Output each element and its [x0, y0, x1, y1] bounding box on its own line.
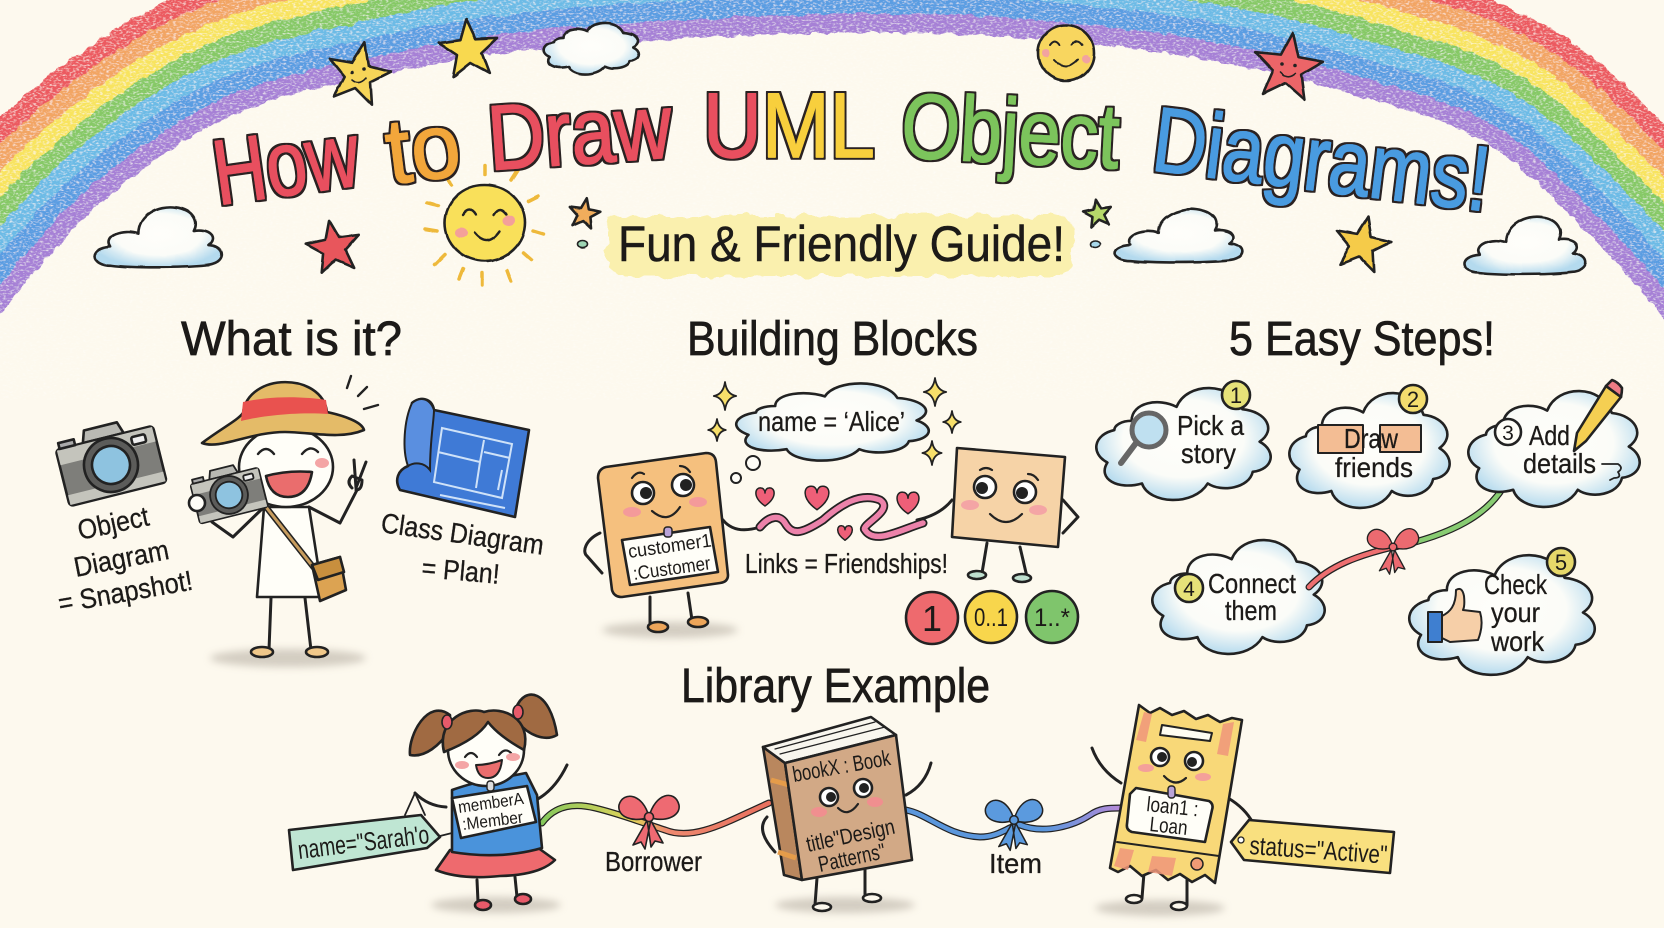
camera caption: = Snapshot! [56, 565, 195, 619]
link arms [723, 500, 952, 530]
panel: 5 easy steps [1096, 380, 1640, 675]
thought cloud [731, 383, 929, 483]
bow: blue [985, 799, 1043, 850]
subtitle with highlight: Fun & Friendly Guide! [618, 216, 1065, 272]
step 3 cloud: details [1523, 448, 1596, 479]
character: customer block [585, 453, 738, 638]
title: Diagrams! [1148, 89, 1495, 231]
attribute tag: name [289, 793, 452, 870]
step 3 cloud: Add [1529, 420, 1570, 451]
bow: red [619, 795, 679, 849]
smiley sun top [1038, 25, 1094, 81]
tag: memberA [452, 781, 536, 838]
title: Draw [484, 75, 675, 190]
star: smiling yellow [322, 36, 396, 108]
character: member girl [410, 695, 567, 913]
camera caption: Diagram [71, 534, 171, 583]
cloud: left [95, 207, 222, 267]
label: Item: Item [989, 848, 1042, 879]
character: book: Patterns" [816, 838, 888, 877]
step 5 cloud [1409, 548, 1595, 675]
character: second block [952, 448, 1078, 582]
cloud: top [544, 23, 639, 74]
attribute tag: status: status="Active" [1249, 830, 1388, 870]
step 5 cloud: Check [1484, 569, 1548, 600]
step 4 cloud: Connect [1208, 568, 1296, 599]
panel: library example [289, 695, 1394, 916]
cloud: far right [1464, 217, 1586, 274]
star: smiling red [1250, 28, 1327, 102]
ribbon: borrower link [542, 803, 769, 833]
pink ribbon link [760, 498, 923, 536]
multiplicity badges: 1..* [1034, 604, 1070, 632]
name tag [622, 527, 718, 585]
title: How [207, 103, 366, 225]
step 4 cloud: them [1225, 595, 1277, 626]
step 1 cloud: 1 [1230, 383, 1242, 408]
hearts [756, 486, 919, 540]
character: book: title"Design [804, 814, 897, 857]
character: loan ticket [1092, 705, 1253, 916]
panel: building blocks [585, 378, 1078, 644]
tag: memberA: memberA [457, 789, 525, 817]
star: small green [1081, 197, 1114, 228]
tag: loan1: loan1 : [1145, 793, 1200, 821]
step 2 cloud: friends [1335, 452, 1413, 483]
name tag: customer1 [627, 530, 713, 563]
ribbon: item link [906, 808, 1120, 837]
step 5 cloud: work [1490, 626, 1545, 657]
star: small orange [567, 196, 602, 229]
step 2 cloud: 2 [1407, 387, 1419, 412]
icon: thumbs up [1428, 589, 1482, 642]
step 2 cloud: Draw [1344, 423, 1399, 454]
label: Borrower: Borrower [605, 846, 702, 877]
highlight swash [606, 216, 1074, 276]
attribute tag: name: name="Sarah'o [296, 819, 431, 865]
multiplicity badges: 1 [922, 598, 942, 639]
star: yellow [437, 17, 501, 78]
title: Object [899, 75, 1122, 188]
character: book: bookX : Book [791, 745, 893, 787]
sun with rays [425, 165, 543, 285]
connecting ribbon 3 to 4 [1395, 482, 1506, 547]
step 2 cloud [1289, 385, 1450, 508]
heading: What is it?: What is it? [181, 313, 402, 366]
camera caption [56, 501, 195, 619]
step 1 cloud [1096, 381, 1271, 500]
name tag: :Customer [632, 553, 713, 585]
tag: loan1: Loan [1148, 813, 1189, 840]
bow [1367, 529, 1419, 574]
title [207, 75, 1495, 231]
star: red [303, 216, 364, 275]
blueprint caption: Class Diagram [379, 507, 546, 561]
step 4 cloud [1152, 540, 1325, 654]
heading: Building Blocks: Building Blocks [687, 313, 978, 366]
blueprint caption: = Plan! [420, 552, 501, 590]
blueprint caption [379, 507, 546, 590]
character: photographer [188, 376, 378, 667]
decorations: sky clouds, stars, suns [95, 17, 1586, 285]
dot: blue [1091, 240, 1101, 248]
heading: 5 Easy Steps: 5 Easy Steps! [1229, 313, 1495, 366]
dot: green [577, 240, 587, 248]
camera caption: Object [75, 501, 152, 546]
icon: pencil [1574, 380, 1622, 451]
step 5 cloud: 5 [1555, 550, 1567, 575]
character: book [762, 717, 931, 913]
step 1 cloud: story [1181, 438, 1236, 469]
panel: what is it [53, 376, 546, 667]
tag: loan1 [1127, 786, 1213, 842]
cloud: centre right [1115, 209, 1243, 262]
step 3 cloud [1468, 380, 1640, 507]
multiplicity badges: 0..1 [974, 604, 1008, 632]
step 4 cloud: 4 [1183, 578, 1195, 601]
star: right yellow [1330, 211, 1395, 274]
step 3 cloud: 3 [1502, 422, 1514, 445]
multiplicity badges [906, 591, 1078, 644]
icon: pointing hand [1602, 464, 1621, 480]
links caption: Links = Friendships! [745, 548, 948, 579]
step 1 cloud: Pick a [1177, 410, 1244, 441]
title: UML [703, 75, 875, 177]
icon: blueprint [397, 399, 529, 517]
tag: memberA: :Member [461, 808, 524, 834]
ribbon: red part [1309, 547, 1393, 587]
thought cloud: name = ‘Alice’ [758, 406, 905, 437]
title: to [380, 94, 466, 204]
step 5 cloud: your [1491, 597, 1540, 628]
heading: Library Example: Library Example [681, 660, 990, 713]
sparkles [708, 378, 961, 465]
attribute tag: status [1231, 820, 1394, 873]
icon: camera [53, 414, 167, 506]
